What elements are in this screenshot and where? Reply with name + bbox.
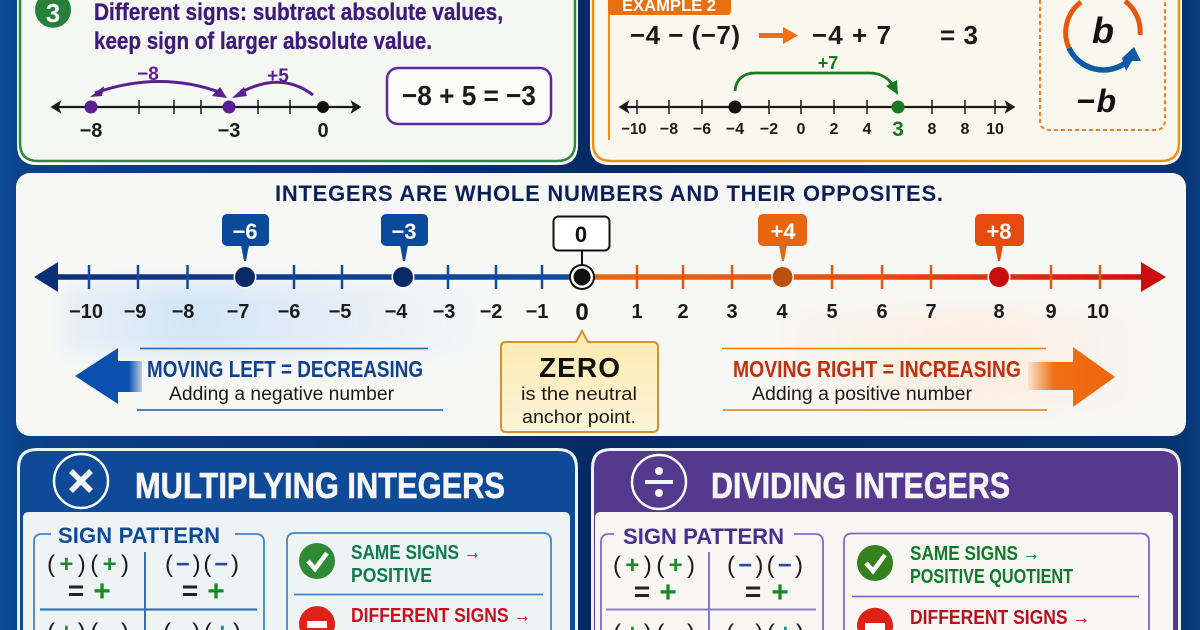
sign pattern table: SIGN PATTERN	[623, 524, 784, 549]
icon: multiply	[54, 454, 108, 508]
axis labels: −4	[385, 301, 408, 323]
arrow	[759, 27, 798, 44]
step number badge	[35, 0, 71, 28]
number line: -4 + 7: −8	[660, 121, 678, 138]
number line: -8 + 5: −3	[218, 120, 240, 142]
example equation: = 3	[940, 20, 978, 50]
zero callout	[501, 331, 658, 432]
same positive cell: ( + ) ( + )	[613, 552, 695, 579]
heading: DIVIDING INTEGERS	[711, 465, 1010, 506]
lower row	[613, 620, 804, 630]
number line: -4 + 7: 0	[797, 121, 806, 138]
number line: -4 + 7	[620, 53, 1014, 141]
callout: -6	[222, 214, 269, 261]
number line: -8 + 5: 0	[317, 120, 329, 142]
axis labels	[69, 301, 1109, 323]
equation box	[387, 68, 551, 124]
zero axis label: 0	[575, 299, 589, 326]
same positive cell: =	[634, 576, 650, 607]
icon: check	[857, 545, 893, 581]
example equation	[630, 20, 978, 50]
axis labels: −2	[480, 301, 502, 323]
different signs rule: DIFFERENT SIGNS →	[910, 607, 1090, 629]
number line: -8 + 5: −8	[137, 64, 159, 85]
example equation: −4 − (−7)	[630, 20, 740, 50]
moving left block: MOVING LEFT = DECREASING	[147, 356, 423, 382]
same positive cell: =	[68, 575, 84, 606]
rule text	[94, 0, 503, 55]
axis labels: −9	[124, 301, 146, 323]
number line: -4 + 7: 2	[830, 121, 839, 138]
same positive cell	[47, 551, 129, 608]
same signs rule: SAME SIGNS →	[910, 543, 1040, 565]
axis labels: 8	[993, 301, 1005, 323]
callout: -6: −6	[232, 219, 258, 244]
number line: -4 + 7: −4	[726, 121, 744, 138]
sign pattern table: SIGN PATTERN	[58, 523, 220, 548]
number line: -4 + 7: 8	[928, 121, 937, 138]
axis labels: 2	[677, 301, 689, 323]
number line: -4 + 7: −6	[693, 121, 711, 138]
number line: -4 + 7: +7	[818, 53, 838, 73]
zero callout: is the neutral	[521, 384, 637, 404]
equation box: −8 + 5 = −3	[402, 80, 536, 111]
callout: 0: 0	[575, 222, 587, 247]
number line: -4 + 7: 10	[986, 121, 1004, 138]
sign pattern table	[601, 524, 823, 630]
same positive cell	[613, 552, 695, 609]
callout: +4: +4	[770, 219, 796, 244]
icon: minus	[299, 606, 335, 630]
rule text: keep sign of larger absolute value.	[94, 28, 432, 55]
same positive cell: +	[93, 575, 111, 608]
axis labels: −5	[329, 301, 351, 323]
same negative cell: ( − ) ( − )	[727, 552, 803, 579]
axis labels: 10	[1087, 301, 1109, 323]
example equation: −4 + 7	[812, 20, 891, 50]
callout: +4	[758, 214, 807, 261]
number line: -4 + 7: 4	[863, 121, 872, 138]
number line: -4 + 7: −10	[622, 121, 647, 138]
same signs rule: SAME SIGNS →	[351, 542, 481, 564]
number line: -8 + 5: +5	[267, 66, 289, 87]
same positive cell: +	[659, 576, 677, 609]
callout: 0	[554, 216, 610, 266]
panel: dividing integers	[592, 450, 1180, 630]
axis labels: 9	[1045, 301, 1057, 323]
same negative cell	[165, 551, 239, 608]
rules box	[844, 534, 1149, 630]
moving right block: Adding a positive number	[752, 384, 973, 405]
panel: integers number line	[16, 173, 1186, 436]
opposite concept box: b	[1092, 10, 1114, 51]
icon: check	[299, 543, 335, 579]
number line axis	[34, 262, 1166, 292]
panel: multiplying integers	[18, 450, 576, 630]
callout: -3: −3	[391, 219, 417, 244]
moving left block	[75, 348, 443, 410]
icon: minus	[857, 608, 893, 630]
same negative cell: =	[182, 575, 198, 606]
lower row	[47, 619, 241, 630]
axis labels: 6	[876, 301, 888, 323]
zero callout: ZERO	[539, 352, 620, 383]
number line: -4 + 7: 3	[892, 118, 904, 141]
same negative cell	[727, 552, 803, 609]
different signs rule: DIFFERENT SIGNS →	[351, 605, 531, 627]
axis labels: −1	[526, 301, 548, 323]
axis labels: 3	[726, 301, 738, 323]
heading: MULTIPLYING INTEGERS	[135, 465, 505, 506]
rules box	[287, 533, 551, 630]
axis labels: 4	[776, 301, 788, 323]
same signs rule	[910, 543, 1073, 588]
axis labels: −10	[69, 301, 103, 323]
moving left block: Adding a negative number	[169, 384, 395, 405]
callout: +8: +8	[986, 219, 1012, 244]
number line: -8 + 5	[52, 64, 360, 142]
heading: INTEGERS ARE WHOLE NUMBERS AND THEIR OPPOSITES.	[275, 181, 943, 206]
same negative cell: =	[745, 576, 761, 607]
same signs rule: POSITIVE	[351, 565, 432, 587]
callout: +8	[975, 214, 1024, 261]
opposite concept box	[1040, 0, 1165, 130]
axis labels: 1	[631, 301, 643, 323]
number line: -4 + 7: −2	[760, 121, 778, 138]
panel: adding different signs	[17, 0, 578, 165]
same positive cell: ( + ) ( + )	[47, 551, 129, 578]
number line: -8 + 5: −8	[80, 120, 102, 142]
axis labels: −3	[433, 301, 455, 323]
sign pattern table	[34, 523, 264, 630]
number line: -4 + 7: 8	[961, 121, 970, 138]
same signs rule	[351, 542, 481, 587]
moving right block: MOVING RIGHT = INCREASING	[733, 356, 1021, 382]
callout: -3	[381, 214, 428, 261]
same signs rule: POSITIVE QUOTIENT	[910, 566, 1073, 588]
same negative cell: +	[207, 575, 225, 608]
axis labels: −8	[172, 301, 194, 323]
same negative cell: +	[771, 576, 789, 609]
axis labels: 7	[925, 301, 937, 323]
same negative cell: ( − ) ( − )	[165, 551, 239, 578]
opposite concept box: −b	[1076, 83, 1116, 119]
panel: subtracting example	[590, 0, 1182, 165]
axis labels: −7	[227, 301, 249, 323]
axis labels: 5	[826, 301, 838, 323]
icon: divide	[632, 455, 686, 509]
moving right block	[722, 347, 1115, 410]
axis labels: −6	[278, 301, 300, 323]
zero callout: anchor point.	[522, 407, 636, 427]
